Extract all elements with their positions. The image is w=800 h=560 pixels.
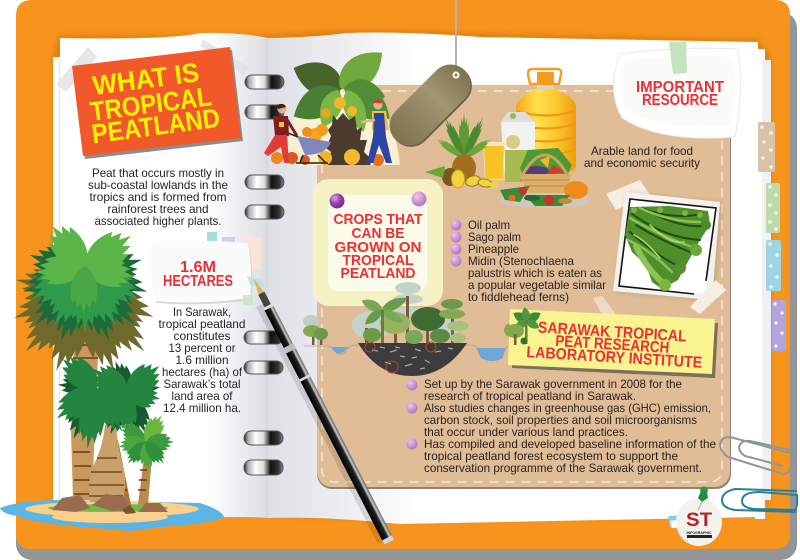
card: crops that can be grown: PEATLAND xyxy=(340,265,416,282)
list: crops: a popular vegetable similar xyxy=(468,278,606,292)
soil xyxy=(358,343,467,376)
text: Sarawak share: 13 percent or xyxy=(168,341,236,355)
card: important resource: IMPORTANT xyxy=(636,79,725,96)
island water xyxy=(0,500,224,531)
badge: ST infographic: INFOGRAPHIC xyxy=(686,530,712,535)
list: institute facts xyxy=(406,377,716,475)
pineapple xyxy=(425,113,498,188)
list: institute facts: Has compiled and developed baseline information of the xyxy=(424,437,716,451)
trunk: big palm xyxy=(71,335,99,500)
crown: big palm xyxy=(8,217,159,377)
oil bottle xyxy=(516,69,576,172)
text: Sarawak share: Sarawak’s total xyxy=(164,377,240,391)
pin: right xyxy=(412,192,426,206)
badge: ST infographic xyxy=(668,486,722,546)
juice glass xyxy=(483,142,505,180)
list: institute facts: research of tropical peatland in Sarawak. xyxy=(424,389,636,403)
title card: what is tropical peatland: TROPICAL xyxy=(88,81,213,127)
juice carton xyxy=(501,112,535,182)
tape on institute card xyxy=(593,296,628,332)
text: arable land: Arable land for food xyxy=(591,144,693,158)
list: institute facts: that occur under various land practices. xyxy=(424,425,628,439)
text: Sarawak share: constitutes xyxy=(174,329,231,343)
text: Sarawak share: In Sarawak, xyxy=(173,305,231,319)
right grove xyxy=(514,330,516,345)
title card: what is tropical peatland: PEATLAND xyxy=(90,103,222,149)
card: 1.6M hectares: 1.6M xyxy=(180,259,216,276)
pin: green xyxy=(698,486,708,502)
vegetable basket xyxy=(499,148,591,208)
index tabs xyxy=(758,122,786,351)
tan panel xyxy=(317,85,731,489)
text: arable land xyxy=(584,144,700,170)
text: peat definition xyxy=(88,166,228,228)
trees xyxy=(352,311,392,339)
fern bundle xyxy=(625,206,711,291)
illustration: oil, juice, pineapple and vegetable basket xyxy=(425,69,591,208)
trunk: bulging palm xyxy=(89,425,125,502)
list: crops xyxy=(450,218,606,304)
trunk: thin palms xyxy=(112,440,153,506)
photo: midin ferns xyxy=(606,180,726,314)
list: institute facts: carbon stock, soil properties and soil microorganisms xyxy=(424,413,697,427)
list: institute facts: Also studies changes in greenhouse gas (GHC) emission, xyxy=(424,401,711,415)
text: peat definition: tropics and is formed from xyxy=(90,190,227,204)
card: Sarawak tropical peat research laboratory institute: PEAT RESEARCH xyxy=(555,333,670,357)
palm trunk xyxy=(326,113,372,165)
text: Sarawak share: 12.4 million ha. xyxy=(163,401,241,415)
card: important resource xyxy=(613,42,740,138)
card: crops that can be grown xyxy=(313,179,443,306)
text: peat definition: associated higher plants. xyxy=(94,214,222,228)
card: Sarawak tropical peat research laboratory institute: SARAWAK TROPICAL xyxy=(537,319,687,346)
card: Sarawak tropical peat research laboratory institute: LABORATORY INSTITUTE xyxy=(526,344,703,372)
list: crops: Sago palm xyxy=(468,230,521,244)
title card: what is tropical peatland xyxy=(56,39,250,159)
illustration: oil palm plantation workers xyxy=(264,41,400,166)
pin: left xyxy=(330,194,344,208)
list: crops: Pineapple xyxy=(468,242,519,256)
paperclip: blue xyxy=(722,489,797,512)
text: arable land: and economic security xyxy=(584,156,700,170)
card: 1.6M hectares xyxy=(150,232,265,305)
card: crops that can be grown: CROPS THAT xyxy=(334,211,422,228)
worker right xyxy=(361,99,392,163)
paperclip: grey xyxy=(720,437,794,474)
card: 1.6M hectares: HECTARES xyxy=(163,273,233,290)
left grove xyxy=(312,322,314,345)
card: important resource: RESOURCE xyxy=(642,92,718,109)
text: peat definition: Peat that occurs mostly in xyxy=(92,166,224,180)
list: institute facts: tropical peatland forest ecosystem to support the xyxy=(424,449,678,463)
list: institute facts: conservation programme of the Sarawak government. xyxy=(424,461,702,475)
illustration: palm trees on island xyxy=(0,217,224,531)
card: crops that can be grown: GROWN ON xyxy=(334,239,422,256)
card: crops that can be grown: TROPICAL xyxy=(342,252,414,269)
list: crops: to fiddlehead ferns) xyxy=(468,290,569,304)
hanging tag xyxy=(381,0,480,155)
rocks xyxy=(52,494,168,514)
card: Sarawak tropical peat research laboratory institute xyxy=(506,307,718,378)
text: peat definition: rainforest trees and xyxy=(108,202,208,216)
text: Sarawak share: land area of xyxy=(172,389,233,403)
palm fronds xyxy=(286,41,398,135)
crown: medium palms xyxy=(49,349,167,451)
list: crops: Oil palm xyxy=(468,218,510,232)
text: Sarawak share xyxy=(158,305,246,415)
card: crops that can be grown: CAN BE xyxy=(352,225,404,242)
title card: what is tropical peatland: WHAT IS xyxy=(91,57,201,101)
text: Sarawak share: tropical peatland xyxy=(158,317,246,331)
text: Sarawak share: hectares (ha) of xyxy=(162,365,243,379)
pen xyxy=(244,276,395,547)
list: crops: Midin (Stenochlaena xyxy=(468,254,574,268)
crown: small palm xyxy=(116,411,174,471)
badge: ST infographic: ST xyxy=(686,510,712,531)
list: institute facts: Set up by the Sarawak government in 2008 for the xyxy=(424,377,682,391)
wheelbarrow xyxy=(297,136,331,155)
list: crops: palustris which is eaten as xyxy=(468,266,602,280)
sand xyxy=(25,501,199,523)
illustration: peat forest ecosystem xyxy=(303,282,524,376)
text: Sarawak share: 1.6 million xyxy=(176,353,228,367)
text: peat definition: sub-coastal lowlands in the xyxy=(88,178,228,192)
worker left xyxy=(264,104,297,163)
notebook pages xyxy=(53,30,771,524)
notebook rings xyxy=(244,75,284,475)
